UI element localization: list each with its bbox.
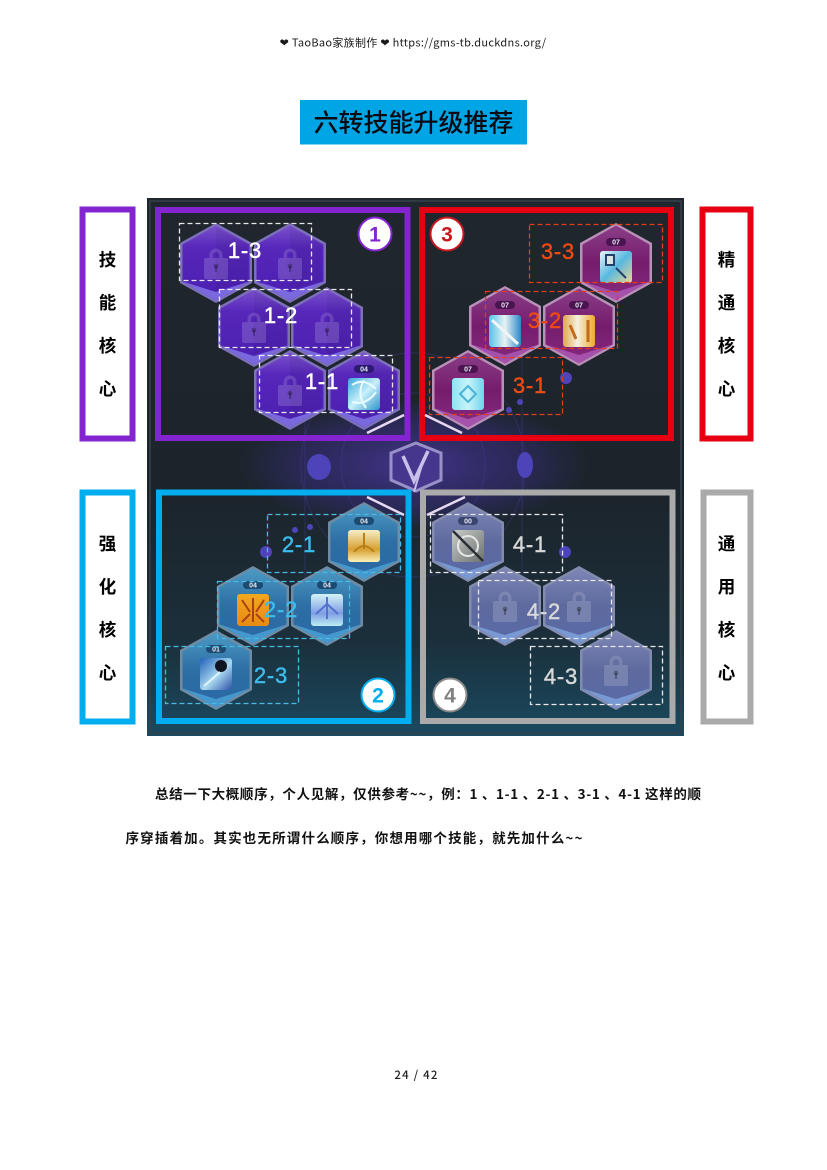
side label: common core — [704, 492, 750, 722]
labels 3-x — [513, 239, 575, 398]
side label: mastery core: 通 — [718, 290, 736, 315]
hexagon group: enhancement nodes — [180, 502, 400, 710]
number badge 3: 3 — [441, 224, 453, 246]
side label: common core: 核 — [718, 617, 736, 642]
labels 3-x: 3-3 — [541, 239, 575, 264]
hexagon group: mastery nodes — [432, 223, 652, 430]
panel: common core — [423, 492, 672, 721]
labels 3-x: 3-2 — [528, 308, 562, 333]
number badge 4 — [434, 678, 466, 712]
labels 4-x: 4-2 — [527, 599, 561, 624]
labels 1-x — [228, 238, 339, 394]
side label: mastery core: 核 — [718, 333, 736, 358]
hexagon group: common nodes: 00 — [464, 518, 472, 526]
number badge 3 — [430, 218, 464, 250]
panel: skill core — [158, 210, 408, 438]
labels 2-x: 2-1 — [282, 532, 316, 557]
labels 4-x: 4-3 — [544, 664, 578, 689]
summary paragraph: 总结一下大概顺序，个人见解，仅供参考~~，例：1 、1-1 、2-1 、3-1 、4-1 这样的顺 — [155, 783, 702, 803]
dashed groups 2-1 to 2-3 — [166, 514, 400, 704]
hexagon group: enhancement nodes: 04 — [249, 582, 257, 590]
accent strip — [367, 497, 404, 515]
number badge 4: 4 — [444, 684, 456, 708]
game screenshot background — [147, 198, 684, 736]
labels 4-x: 4-1 — [513, 532, 547, 557]
labels 2-x: 2-2 — [264, 597, 298, 622]
panel: enhancement core — [159, 492, 408, 721]
center emblem — [391, 443, 441, 492]
page number: 24 / 42 — [394, 1067, 439, 1083]
side label: skill core: 技 — [99, 247, 117, 272]
number badge 2: 2 — [372, 684, 384, 708]
side label: common core: 用 — [718, 574, 735, 599]
side label: enhancement core: 心 — [99, 660, 117, 685]
side label: enhancement core: 强 — [99, 531, 117, 556]
labels 1-x: 1-2 — [264, 303, 298, 328]
accent strip — [427, 497, 465, 515]
side label: mastery core: 精 — [718, 247, 735, 272]
labels 1-x: 1-3 — [228, 238, 262, 263]
summary paragraph: 序穿插着加。其实也无所谓什么顺序，你想用哪个技能，就先加什么~~ — [126, 827, 583, 847]
hexagon group: mastery nodes: 07 — [575, 302, 583, 310]
labels 1-x: 1-1 — [305, 369, 339, 394]
summary paragraph — [126, 783, 702, 847]
side label: skill core: 心 — [99, 376, 117, 401]
side label: mastery core: 心 — [718, 376, 736, 401]
page header: ❤ TaoBao家族制作 ❤ https://gms-tb.duckdns.org/ — [280, 34, 547, 50]
side label: skill core: 核 — [99, 333, 117, 358]
hexagon group: mastery nodes: 07 — [464, 366, 472, 374]
dashed groups 1-1 to 1-3 — [180, 224, 392, 412]
side label: enhancement core: 核 — [99, 617, 117, 642]
title: 六转技能升级推荐 — [313, 104, 514, 140]
accent strip — [425, 415, 462, 433]
labels 2-x — [254, 532, 316, 688]
number badge 2 — [362, 678, 394, 712]
hexagon group: enhancement nodes: 04 — [360, 518, 368, 526]
side label: skill core — [82, 210, 132, 438]
dashed groups 4-1 to 4-3 — [430, 514, 662, 704]
hexagon group: skill nodes: 04 — [360, 366, 368, 374]
number badge 1: 1 — [369, 224, 381, 246]
side label: enhancement core: 化 — [99, 574, 116, 599]
dashed groups 3-1 to 3-3 — [430, 224, 662, 414]
hexagon group: mastery nodes: 07 — [501, 302, 509, 310]
accent strip — [367, 415, 404, 433]
number badge 1 — [358, 218, 392, 250]
labels 3-x: 3-1 — [513, 373, 547, 398]
side label: common core: 心 — [718, 660, 736, 685]
labels 4-x — [513, 532, 578, 689]
side label: common core: 通 — [718, 531, 736, 556]
side label: enhancement core — [82, 492, 132, 722]
hexagon group: mastery nodes: 07 — [612, 240, 620, 246]
hexagon group: enhancement nodes: 04 — [323, 582, 331, 590]
hexagon group: enhancement nodes: 01 — [212, 646, 220, 654]
hexagon group: skill nodes — [180, 223, 400, 430]
hexagon group: common nodes — [432, 502, 652, 710]
side label: skill core: 能 — [99, 290, 117, 315]
side label: mastery core — [702, 210, 750, 438]
labels 2-x: 2-3 — [254, 663, 288, 688]
panel: mastery core — [422, 210, 671, 438]
